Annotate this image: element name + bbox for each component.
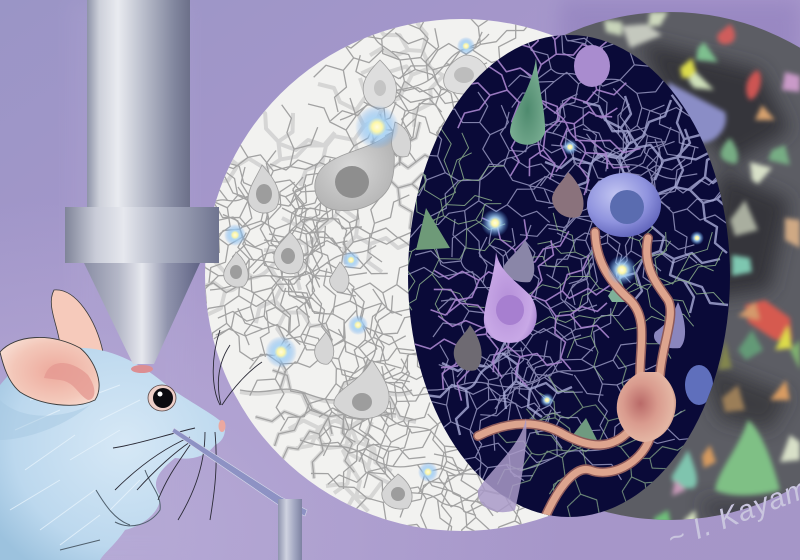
whiskers <box>113 330 262 520</box>
dendrites: green <box>408 128 724 517</box>
panel: grey line-drawing neurons <box>205 19 554 531</box>
glow points <box>224 37 704 482</box>
mouse <box>0 290 262 560</box>
inner ear <box>44 363 94 400</box>
collar <box>65 207 219 263</box>
neuron: grey-lilac <box>504 240 534 282</box>
dendrites: periwinkle <box>408 35 726 500</box>
fluorescent cell bodies <box>604 12 800 532</box>
neuron: lilac right <box>654 302 685 348</box>
dark background blotches <box>640 40 790 520</box>
front ear <box>0 337 99 405</box>
cone <box>84 263 200 364</box>
lick tube <box>172 428 307 516</box>
fur highlights <box>10 385 140 545</box>
neuron: green small <box>608 278 625 302</box>
eye <box>148 385 176 411</box>
neuron: big blue <box>587 173 661 237</box>
body <box>0 348 225 560</box>
neuron: purple top <box>574 45 610 87</box>
paw line <box>60 470 160 550</box>
grey neuron cells <box>224 55 488 509</box>
neuron: brown <box>552 172 584 218</box>
neuron: green lower <box>574 418 597 440</box>
nose <box>218 420 226 432</box>
laser spot <box>131 365 153 373</box>
neuron tubes: pink processes <box>478 232 670 530</box>
dendrite network <box>205 19 550 531</box>
dendrites: thick bright <box>428 94 728 436</box>
microscope objective <box>65 0 219 364</box>
neuron: blue right <box>685 365 713 405</box>
cell nuclei <box>230 67 474 501</box>
neuron: green <box>510 58 545 145</box>
panel: fluorescent image circle <box>564 12 800 520</box>
neuron: purple centre <box>484 252 537 343</box>
neuron: grey <box>454 325 482 371</box>
neurons <box>416 45 713 530</box>
panel: dark neuron circle <box>408 35 800 540</box>
holder stand <box>172 428 307 560</box>
neuron: green left <box>416 208 450 250</box>
neuron: big salmon <box>617 372 676 442</box>
shaft <box>87 0 190 208</box>
fur shadow <box>0 400 90 440</box>
dendrites: purple <box>414 35 641 401</box>
back ear <box>51 290 103 352</box>
soft shaded trunks <box>205 22 444 512</box>
neuron: pale violet cone overlapping the edge <box>478 418 526 512</box>
